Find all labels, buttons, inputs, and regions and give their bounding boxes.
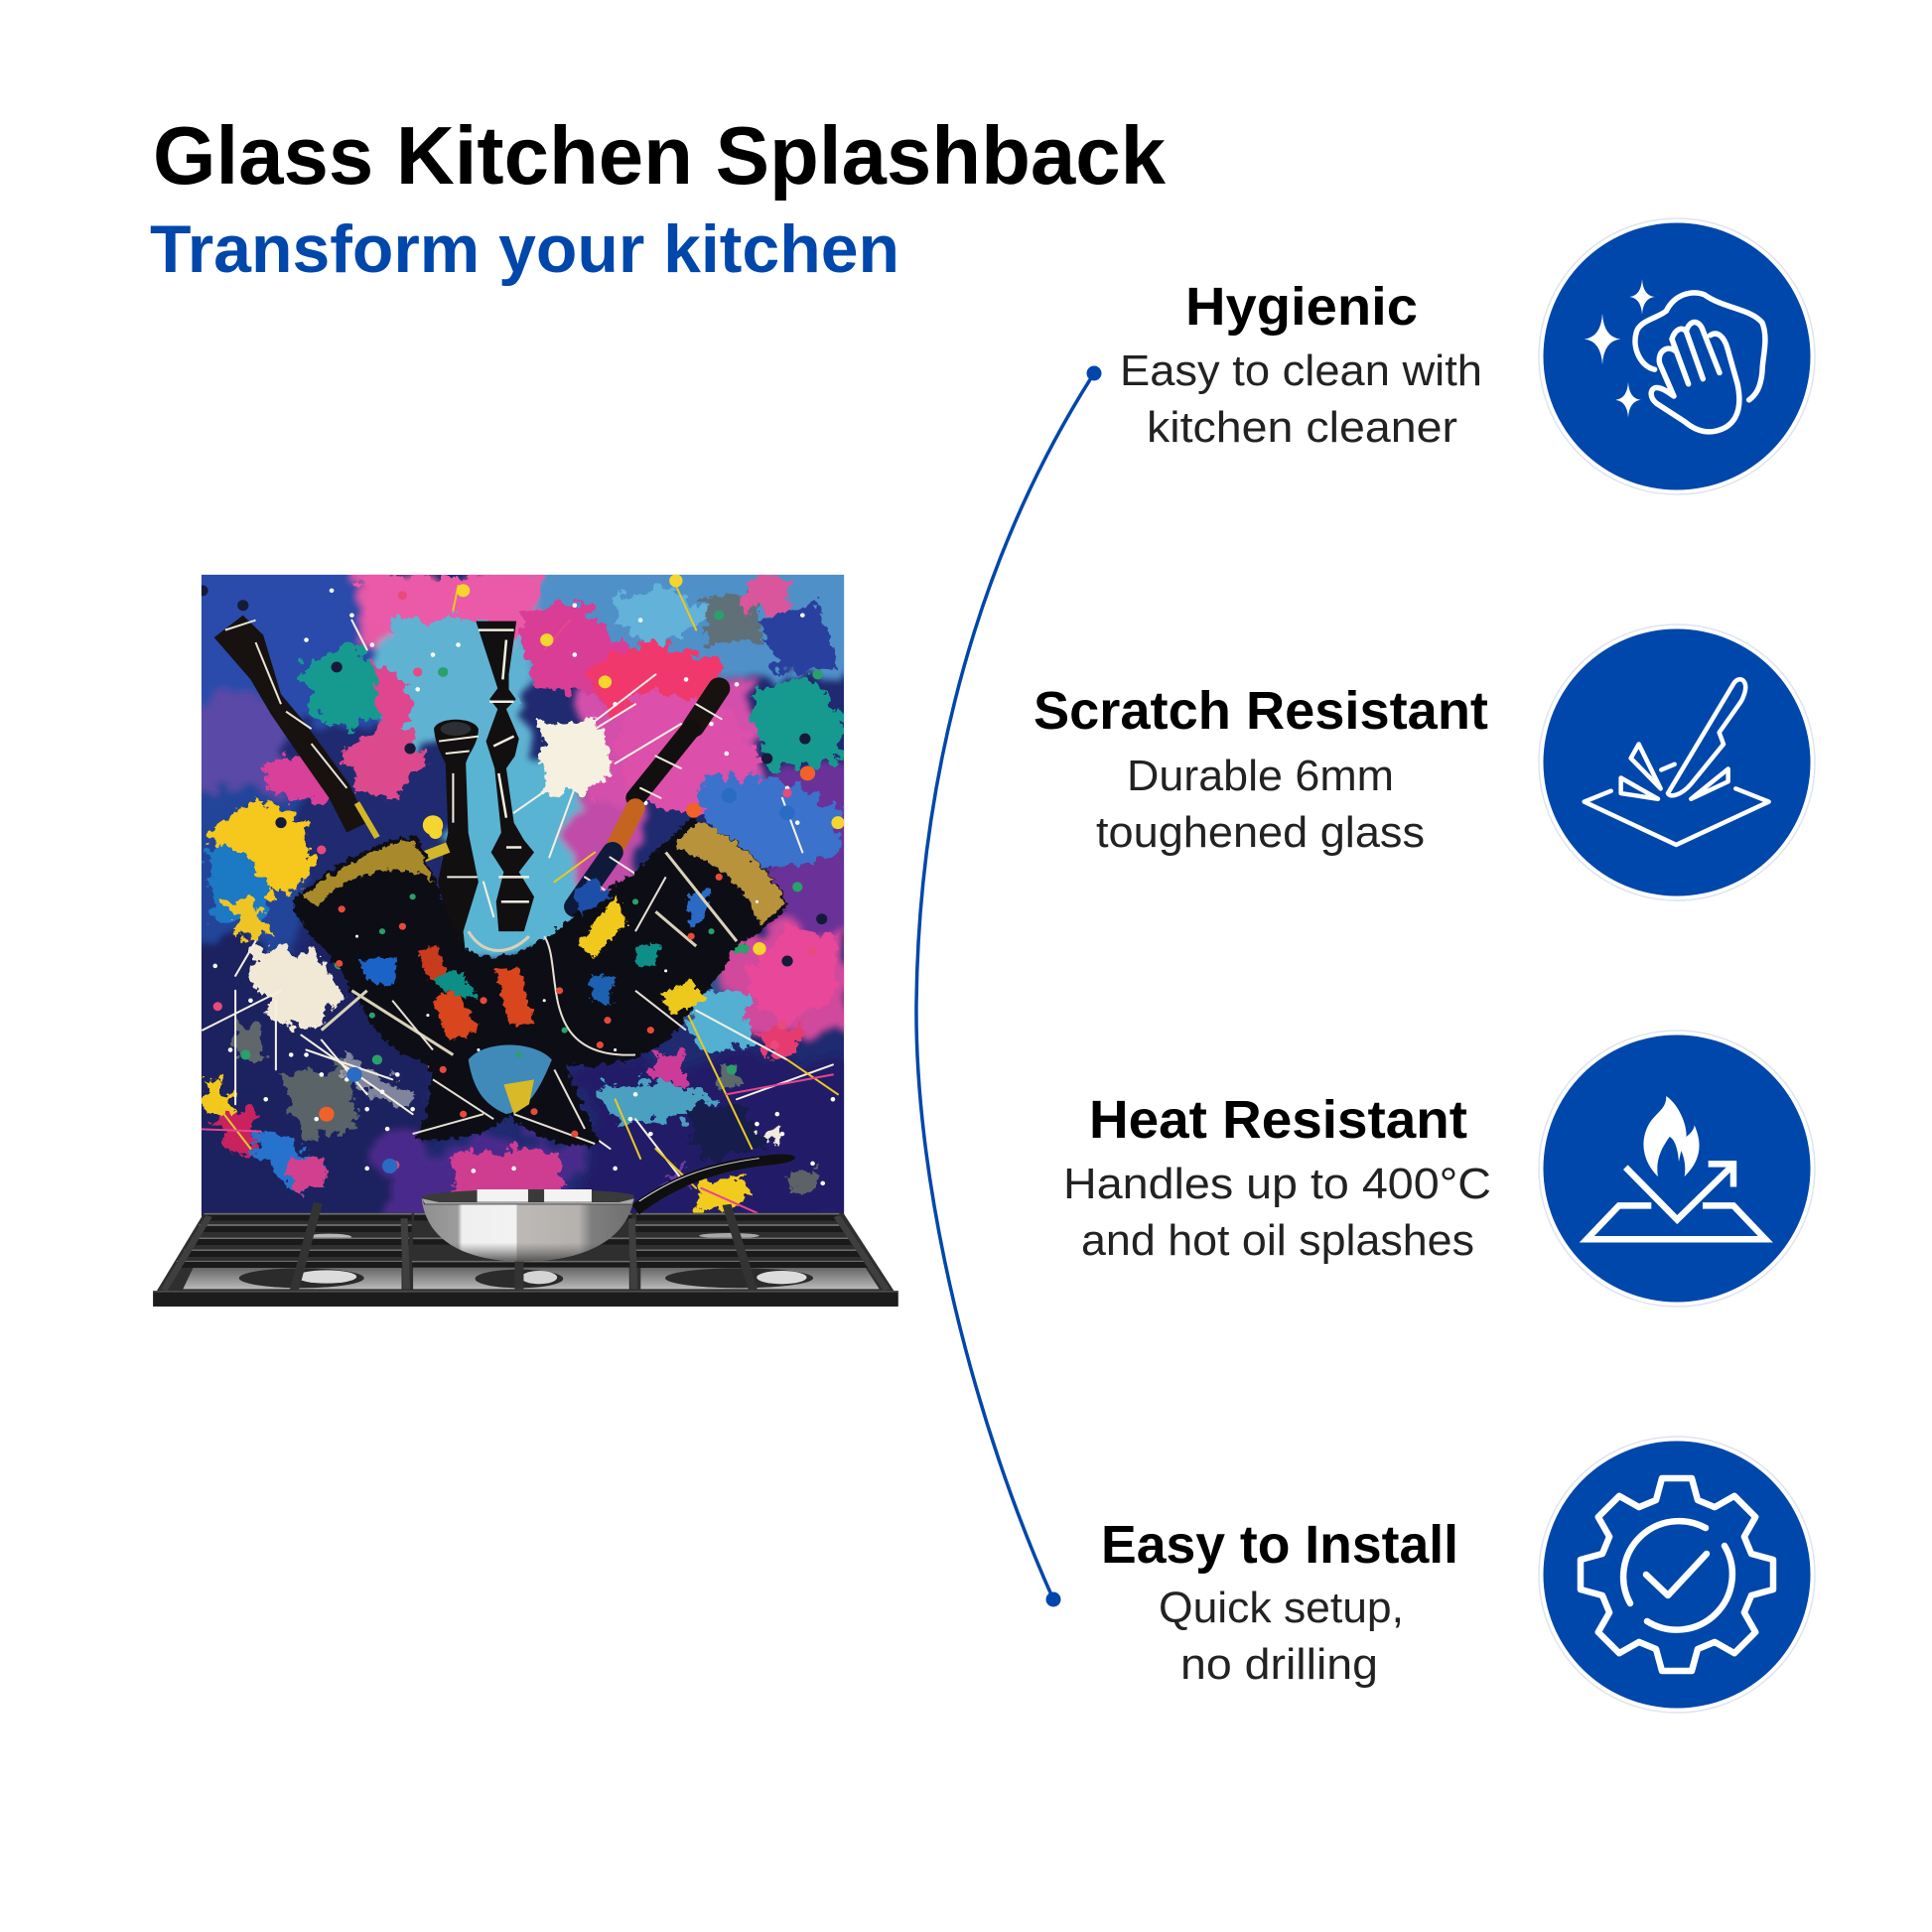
connector curve xyxy=(916,365,1102,1606)
feature: heat resistant: Heat Resistant xyxy=(1089,1090,1467,1150)
gas hob with frying pan xyxy=(153,1155,898,1307)
gap between lower pipes xyxy=(469,1045,552,1114)
subtitle: Transform your kitchen xyxy=(150,211,899,287)
right drone xyxy=(575,688,722,906)
steel burner wells xyxy=(183,1266,880,1289)
feature: easy to install: Quick setup, xyxy=(1159,1584,1404,1632)
paint dots xyxy=(203,581,838,1183)
title: Glass Kitchen Splashback xyxy=(153,109,1167,202)
grates xyxy=(164,1203,887,1291)
splashback panel: paint splatter artwork with bagpipes xyxy=(201,574,844,1217)
bag highlights xyxy=(304,820,784,1042)
feature: heat resistant: Handles up to 400°C xyxy=(1063,1160,1491,1208)
feature: easy to install: no drilling xyxy=(1180,1640,1378,1689)
feature: scratch resistant: Scratch Resistant xyxy=(1034,681,1488,741)
burners xyxy=(239,1233,813,1288)
feature: easy to install xyxy=(1101,1515,1458,1689)
feature: hygienic xyxy=(1120,277,1482,452)
feature: hygienic: kitchen cleaner xyxy=(1147,403,1457,452)
hob top xyxy=(157,1213,895,1292)
bottom dot xyxy=(1046,1592,1060,1606)
feature: scratch resistant: Durable 6mm xyxy=(1127,752,1394,800)
feature: scratch resistant xyxy=(1034,681,1488,857)
icon: cleaning hand xyxy=(1539,218,1815,494)
chanter xyxy=(423,720,479,956)
pan rim and interior xyxy=(422,1189,634,1204)
pan handle xyxy=(631,1155,795,1214)
feature: easy to install: Easy to Install xyxy=(1101,1515,1458,1575)
feature: heat resistant: and hot oil splashes xyxy=(1081,1216,1474,1265)
pan bowl xyxy=(422,1198,634,1262)
front edge xyxy=(153,1292,898,1307)
splatter lines xyxy=(195,586,838,1213)
icon: knife scratching glass xyxy=(1539,624,1815,900)
centre drone xyxy=(476,621,534,931)
feature: heat resistant xyxy=(1063,1090,1491,1265)
bagpipes xyxy=(214,616,787,1147)
feature: hygienic: Easy to clean with xyxy=(1120,346,1482,395)
feature: scratch resistant: toughened glass xyxy=(1096,808,1425,857)
bag xyxy=(291,818,787,1147)
left drone xyxy=(214,616,377,838)
icon: gear with check xyxy=(1539,1437,1815,1713)
icon: flame on glass xyxy=(1539,1031,1815,1307)
top dot xyxy=(1086,365,1102,381)
feature: hygienic: Hygienic xyxy=(1185,277,1418,337)
